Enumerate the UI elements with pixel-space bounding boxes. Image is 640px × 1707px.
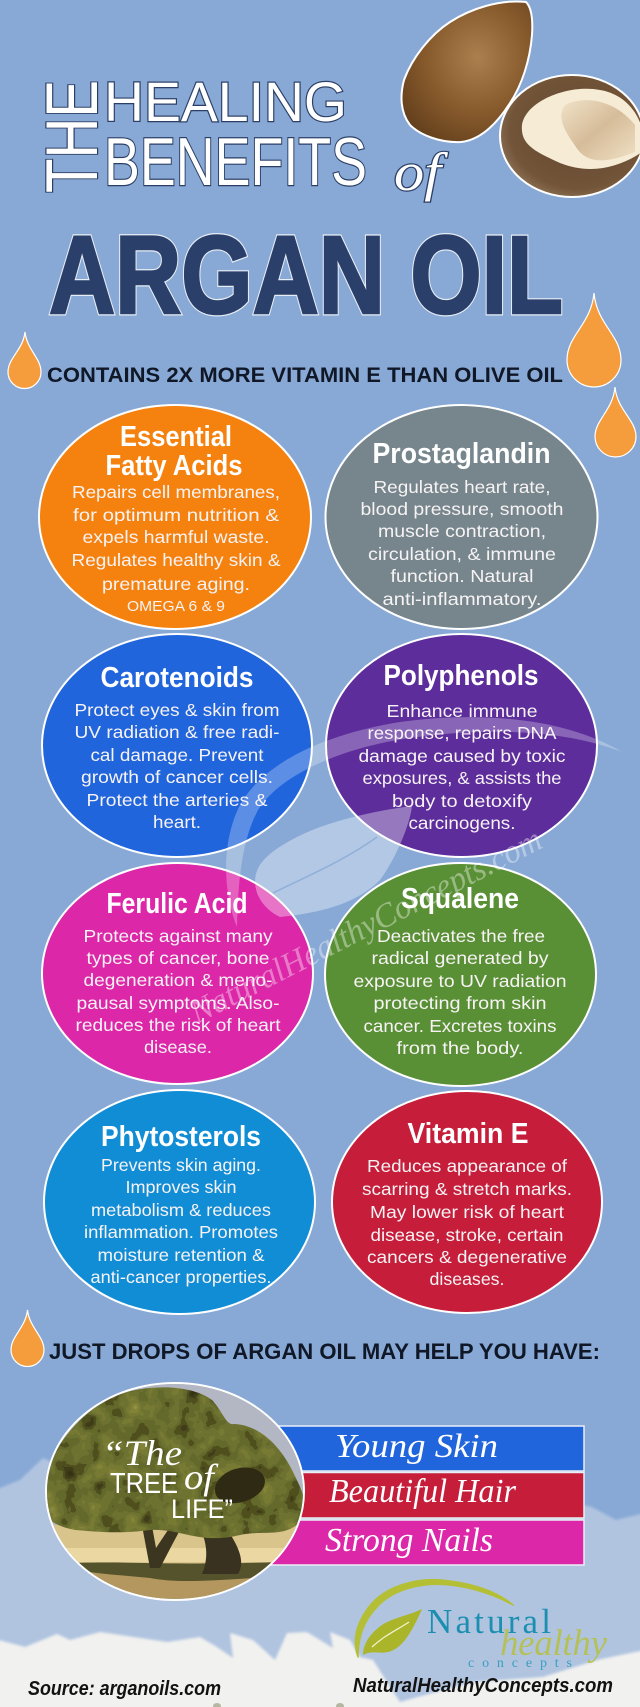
- panel: ferulic acid: reduces the risk of heart: [76, 1015, 281, 1035]
- bar: strong nails: [240, 1520, 584, 1565]
- panel: prostaglandin: blood pressure, smooth: [360, 499, 564, 519]
- word: BENEFITS: BENEFITS: [104, 124, 367, 200]
- argan tree photo: [40, 1380, 310, 1605]
- word: of: of: [394, 142, 449, 202]
- panel: essential fatty acids: OMEGA 6 & 9: [127, 598, 225, 615]
- tree caption: LIFE”: [171, 1494, 233, 1524]
- panel: ferulic acid: Protects against many: [84, 926, 273, 946]
- panel: essential fatty acids: Repairs cell membranes,: [72, 482, 280, 502]
- panel: carotenoids: Carotenoids: [100, 662, 254, 694]
- logo leaf vein: [372, 1622, 409, 1647]
- panel: polyphenols: Polyphenols: [384, 660, 538, 692]
- illustration: argan nuts: [402, 1, 640, 197]
- bar: young skin: [240, 1426, 584, 1471]
- panel: polyphenols: [326, 634, 597, 857]
- panel: phytosterols: Improves skin: [126, 1177, 236, 1197]
- word: HEALING: HEALING: [104, 70, 347, 133]
- panel: squalene: Squalene: [401, 883, 519, 915]
- panel: carotenoids: Protect the arteries &: [86, 790, 268, 810]
- panel: phytosterols: moisture retention &: [98, 1245, 265, 1265]
- panel: ferulic acid: pausal symptoms. Also-: [76, 993, 280, 1013]
- panel: phytosterols: Prevents skin aging.: [101, 1155, 261, 1175]
- panel: ferulic acid: types of cancer, bone: [86, 948, 270, 968]
- panel: prostaglandin: Prostaglandin: [372, 438, 550, 470]
- background clouds: [0, 1632, 640, 1707]
- panel: phytosterols: [44, 1090, 315, 1314]
- logo leaf: [363, 1609, 422, 1655]
- panel: carotenoids: UV radiation & free radi-: [74, 722, 280, 742]
- panel: phytosterols: Phytosterols: [101, 1121, 261, 1153]
- argan shell with kernel: [500, 75, 640, 197]
- panel: carotenoids: cal damage. Prevent: [90, 745, 264, 765]
- argan nut: [402, 1, 532, 142]
- panel: prostaglandin: [326, 405, 598, 629]
- panel: essential fatty acids: expels harmful waste.: [82, 527, 270, 547]
- icon: large oil drop: [567, 293, 621, 387]
- panel: ferulic acid: Ferulic Acid: [106, 888, 248, 920]
- panel: carotenoids: Protect eyes & skin from: [74, 700, 280, 720]
- source credit: Source: arganoils.com: [28, 1678, 221, 1700]
- panel: essential fatty acids: premature aging.: [102, 574, 250, 594]
- tree of life circle: [40, 1380, 310, 1605]
- bar: young skin: Young Skin: [335, 1428, 498, 1465]
- panel: squalene: radical generated by: [372, 948, 549, 968]
- panel: prostaglandin: muscle contraction,: [378, 521, 546, 541]
- panel: prostaglandin: circulation, & immune: [368, 544, 556, 564]
- logo arc: [355, 1580, 513, 1657]
- rotated word: THE: THE: [32, 80, 113, 193]
- panel: vitamin E: May lower risk of heart: [370, 1202, 564, 1222]
- tree caption: [102, 1433, 233, 1524]
- subheading: just drops: JUST DROPS OF ARGAN OIL MAY HELP YOU HAVE:: [49, 1339, 600, 1364]
- panel: essential fatty acids: for optimum nutrition &: [73, 505, 279, 525]
- panel: squalene: Deactivates the free: [377, 926, 545, 946]
- panel: polyphenols: Enhance immune: [386, 701, 538, 721]
- treetops at bottom edge: [213, 1703, 344, 1707]
- panel: squalene: [325, 863, 596, 1086]
- panel: vitamin E: diseases.: [430, 1269, 504, 1289]
- panel: carotenoids: [42, 634, 312, 857]
- logo word: Natural: Natural: [427, 1602, 551, 1641]
- panel: vitamin E: [332, 1091, 602, 1313]
- website url: NaturalHealthyConcepts.com: [353, 1675, 613, 1697]
- panel: vitamin E: Vitamin E: [408, 1118, 528, 1150]
- panel: polyphenols: response, repairs DNA: [368, 723, 557, 743]
- panel: phytosterols: anti-cancer properties.: [90, 1267, 272, 1287]
- watermark leaf vein: [273, 837, 377, 893]
- panel: squalene: cancer. Excretes toxins: [364, 1016, 557, 1036]
- panel: essential fatty acids: Essential: [120, 421, 232, 453]
- icon: bottom oil drop: [11, 1310, 44, 1366]
- heading: the healing benefits: [32, 70, 449, 202]
- panel: squalene: protecting from skin: [374, 993, 546, 1013]
- panel: ferulic acid: disease.: [144, 1037, 212, 1057]
- panel: phytosterols: inflammation. Promotes: [84, 1222, 278, 1242]
- icon: left oil drop: [8, 332, 41, 389]
- logo word: concepts: concepts: [468, 1656, 572, 1671]
- panel: essential fatty acids: [39, 405, 311, 629]
- watermark swoosh: [226, 717, 622, 927]
- logo: natural healthy concepts: [355, 1580, 608, 1671]
- tree caption: TREE: [110, 1468, 178, 1500]
- panel: ferulic acid: [42, 863, 313, 1084]
- benefit bars: [240, 1426, 584, 1565]
- panel: essential fatty acids: Fatty Acids: [106, 450, 242, 482]
- watermark: natural healthy concepts: [183, 717, 622, 1032]
- bar: strong nails: Strong Nails: [325, 1522, 493, 1559]
- panel: carotenoids: heart.: [153, 812, 201, 832]
- circle border: [46, 1383, 304, 1600]
- subheading: vitamin E: CONTAINS 2X MORE VITAMIN E THAN OLIVE OIL: [47, 364, 563, 387]
- watermark leaf: [255, 806, 412, 917]
- panel: prostaglandin: function. Natural: [390, 566, 534, 586]
- panel: polyphenols: carcinogens.: [408, 813, 516, 833]
- panel: vitamin E: disease, stroke, certain: [370, 1225, 564, 1245]
- bar: beautiful hair: [240, 1472, 584, 1518]
- panel: vitamin E: cancers & degenerative: [367, 1247, 567, 1267]
- panel: vitamin E: Reduces appearance of: [367, 1156, 567, 1176]
- panel: squalene: from the body.: [396, 1038, 524, 1058]
- panel: essential fatty acids: Regulates healthy skin &: [72, 550, 281, 570]
- panel: prostaglandin: Regulates heart rate,: [374, 477, 550, 497]
- background mountain: [0, 1458, 640, 1707]
- panel: ferulic acid: degeneration & meno-: [84, 970, 273, 990]
- panel: polyphenols: body to detoxify: [392, 791, 532, 811]
- icon: small oil drop: [595, 387, 636, 457]
- watermark text: NaturalHealthyConcepts.com: [183, 821, 548, 1032]
- panel: carotenoids: growth of cancer cells.: [81, 767, 273, 787]
- panel: prostaglandin: anti-inflammatory.: [382, 589, 542, 609]
- panel: polyphenols: exposures, & assists the: [362, 768, 562, 788]
- logo word: healthy: healthy: [500, 1623, 608, 1664]
- tree caption: “The: [102, 1433, 182, 1473]
- tree caption: of: [184, 1457, 219, 1497]
- bar: beautiful hair: Beautiful Hair: [329, 1473, 517, 1510]
- panel: vitamin E: scarring & stretch marks.: [362, 1179, 572, 1199]
- panel: phytosterols: metabolism & reduces: [91, 1200, 271, 1220]
- panel: polyphenols: damage caused by toxic: [358, 746, 566, 766]
- panel: squalene: exposure to UV radiation: [354, 971, 566, 991]
